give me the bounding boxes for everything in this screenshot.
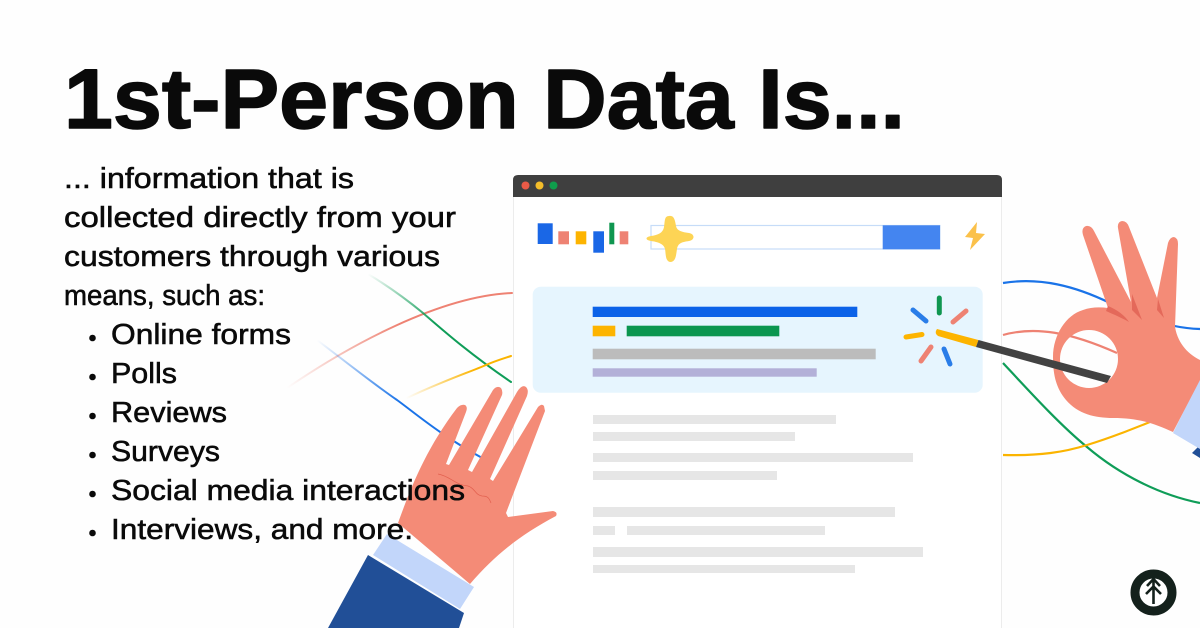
bullet list of collection methods: Polls bbox=[111, 358, 177, 390]
icon: sparkle star bbox=[646, 216, 694, 262]
intro text block: means, such as: bbox=[64, 280, 265, 312]
intro text block: customers through various bbox=[64, 241, 440, 273]
title bar bbox=[513, 175, 1002, 197]
bullet list of collection methods: Surveys bbox=[111, 436, 220, 468]
intro text block: ... information that is bbox=[64, 163, 354, 195]
intro text block: collected directly from your bbox=[64, 202, 456, 234]
palm crease bbox=[438, 474, 491, 503]
highlighted search result panel bbox=[533, 287, 983, 393]
bullet list of collection methods: Online forms bbox=[111, 319, 291, 351]
intro text block bbox=[64, 163, 456, 312]
icon: brand logo tree badge bbox=[1135, 574, 1172, 611]
title: 1st-Person Data Is... bbox=[64, 52, 905, 146]
bullet list of collection methods: Social media interactions bbox=[111, 475, 465, 507]
palm and fingers bbox=[398, 386, 557, 584]
sleeve bbox=[328, 555, 464, 628]
result url bar bbox=[627, 326, 779, 336]
result title bar bbox=[593, 307, 857, 317]
search bar bbox=[651, 225, 940, 249]
browser window bbox=[513, 175, 1002, 628]
hand with finger ring bbox=[1053, 221, 1200, 432]
cuff bbox=[1173, 378, 1200, 449]
bullet list of collection methods bbox=[89, 319, 465, 546]
search result placeholder lines bbox=[593, 415, 923, 573]
illustration: left hand with sleeve bbox=[328, 386, 557, 628]
window body bbox=[514, 176, 1002, 628]
search engine logo bbox=[538, 223, 628, 253]
curved lines: right of browser bbox=[1003, 281, 1200, 503]
bullet list of collection methods: Interviews, and more. bbox=[111, 514, 413, 546]
magic wand bbox=[936, 329, 1111, 383]
icon: wand sparks bbox=[906, 298, 966, 364]
sleeve bbox=[1192, 445, 1200, 458]
result purple bar bbox=[593, 368, 817, 377]
illustration: right hand holding wand bbox=[936, 221, 1200, 458]
cuff bbox=[373, 534, 474, 609]
finger fold shadows bbox=[1106, 294, 1164, 322]
icon: lightning bolt bbox=[965, 222, 985, 250]
bullet list of collection methods: Reviews bbox=[111, 397, 227, 429]
window buttons bbox=[522, 182, 558, 190]
result text bar bbox=[593, 349, 876, 359]
curved lines: left of browser bbox=[287, 274, 512, 459]
result tag bbox=[593, 326, 615, 336]
